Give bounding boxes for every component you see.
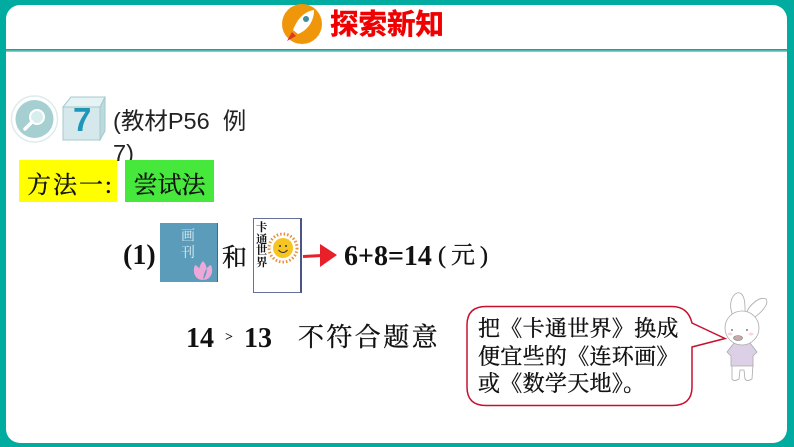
book: cartoon world	[253, 218, 302, 293]
book: cartoon world: 卡通世界	[256, 222, 268, 268]
greater-than sign: >	[225, 330, 233, 345]
label: trial method: 尝试法	[134, 173, 206, 199]
comparison: 14	[186, 323, 214, 354]
label: trial method	[125, 160, 214, 202]
book: picture magazine: 画刊	[181, 229, 195, 261]
label: method one: 方法一:	[27, 173, 114, 199]
unit: (元)	[438, 243, 493, 269]
title: 探索新知	[330, 2, 444, 43]
speech bubble text: 便宜些的《连环画》	[478, 344, 679, 368]
icon: rocket badge	[282, 4, 322, 44]
textbook reference: (教材P56 例 7)	[113, 108, 246, 166]
equation row label (1): (1)	[123, 240, 156, 271]
icon: magnifier disc	[10, 95, 58, 143]
icon: number cube 7: 7	[73, 101, 91, 138]
speech bubble text: 把《卡通世界》换成	[478, 316, 679, 341]
header divider	[6, 49, 787, 52]
equation: 6+8=14	[344, 241, 432, 272]
label: method one	[19, 160, 117, 202]
verdict text: 不符合题意	[298, 323, 440, 352]
word: and: 和	[222, 245, 247, 272]
speech bubble text: 或《数学天地》。	[478, 371, 645, 396]
illustration: rabbit	[724, 292, 768, 381]
number 13: 13	[244, 323, 272, 354]
book: picture magazine	[160, 223, 218, 282]
icon: number cube 7	[62, 96, 106, 141]
arrow	[302, 244, 337, 267]
speech bubble text	[478, 316, 679, 396]
speech bubble	[466, 306, 728, 406]
